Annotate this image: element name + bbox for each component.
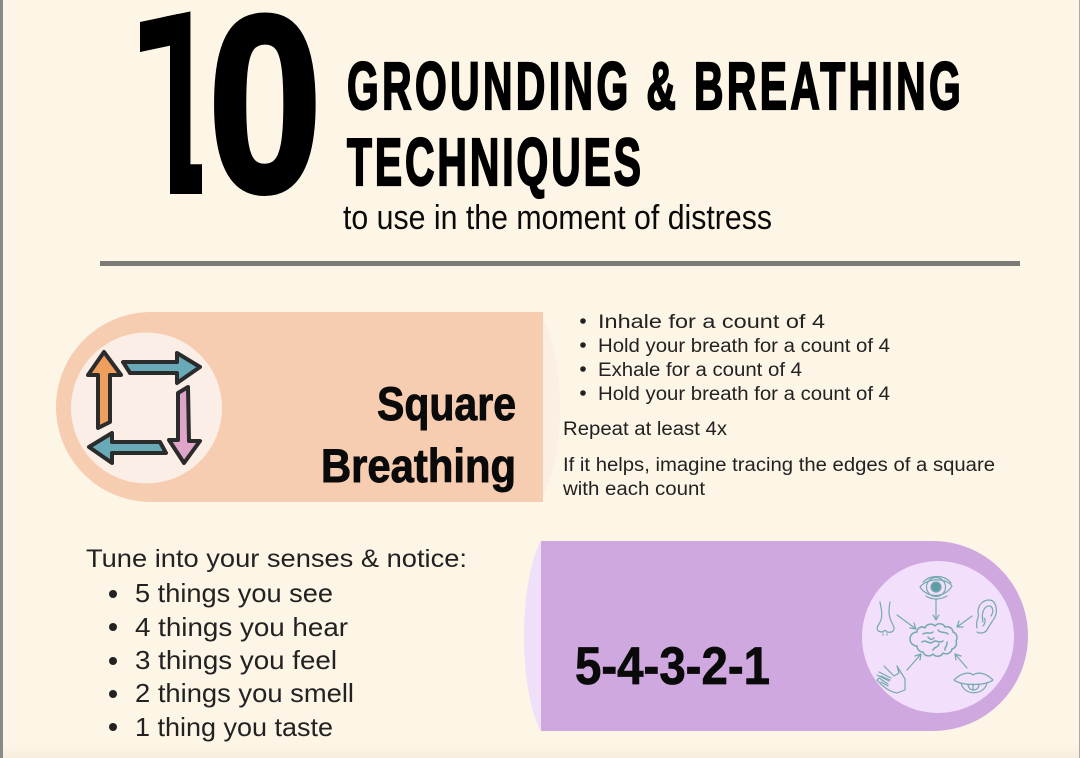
text block: square breathing steps — [562, 312, 995, 500]
title: grounding and breathing techniques — [347, 49, 961, 199]
mouth — [954, 654, 993, 693]
text block: square breathing steps: Hold your breath for a count of 4 — [598, 336, 890, 357]
text block: senses list: 1 thing you taste — [135, 712, 333, 742]
text block: senses list: 3 things you feel — [135, 645, 337, 675]
icon: square of four arrows — [88, 352, 200, 463]
text block: square breathing steps: with each count — [562, 479, 706, 500]
text block: senses list: 2 things you smell — [135, 678, 354, 708]
ear — [957, 600, 996, 633]
hand — [877, 654, 921, 693]
heading: square breathing — [321, 377, 516, 492]
text block: square breathing steps: If it helps, imagine tracing the edges of a square — [563, 455, 995, 476]
title: grounding and breathing techniques: GROUNDING & BREATHING — [347, 49, 961, 123]
nose — [877, 602, 916, 635]
text block: square breathing steps: Repeat at least 4x — [563, 419, 728, 440]
text block: senses list: 4 things you hear — [135, 612, 348, 642]
icon: five senses and brain — [877, 576, 996, 693]
panel: square breathing — [56, 312, 560, 502]
title: grounding and breathing techniques: TECHNIQUES — [347, 125, 641, 199]
panel: 5-4-3-2-1 — [524, 541, 1028, 731]
divider line — [100, 261, 1020, 266]
heading: square breathing: Breathing — [321, 439, 516, 492]
heading: square breathing: Square — [377, 377, 516, 430]
eye — [920, 576, 952, 620]
brain — [910, 624, 957, 656]
text block: senses list: Tune into your senses & notice: — [86, 545, 467, 573]
subtitle: to use in the moment of distress — [343, 199, 772, 237]
text block: square breathing steps: Hold your breath for a count of 4 — [598, 384, 890, 405]
text block: senses list — [86, 545, 467, 742]
title: big number 10 — [140, 11, 316, 196]
heading: 5-4-3-2-1: 5-4-3-2-1 — [575, 637, 770, 696]
text block: square breathing steps: Exhale for a count of 4 — [598, 360, 802, 381]
text block: square breathing steps: Inhale for a count of 4 — [598, 312, 826, 333]
text block: senses list: 5 things you see — [135, 578, 333, 608]
